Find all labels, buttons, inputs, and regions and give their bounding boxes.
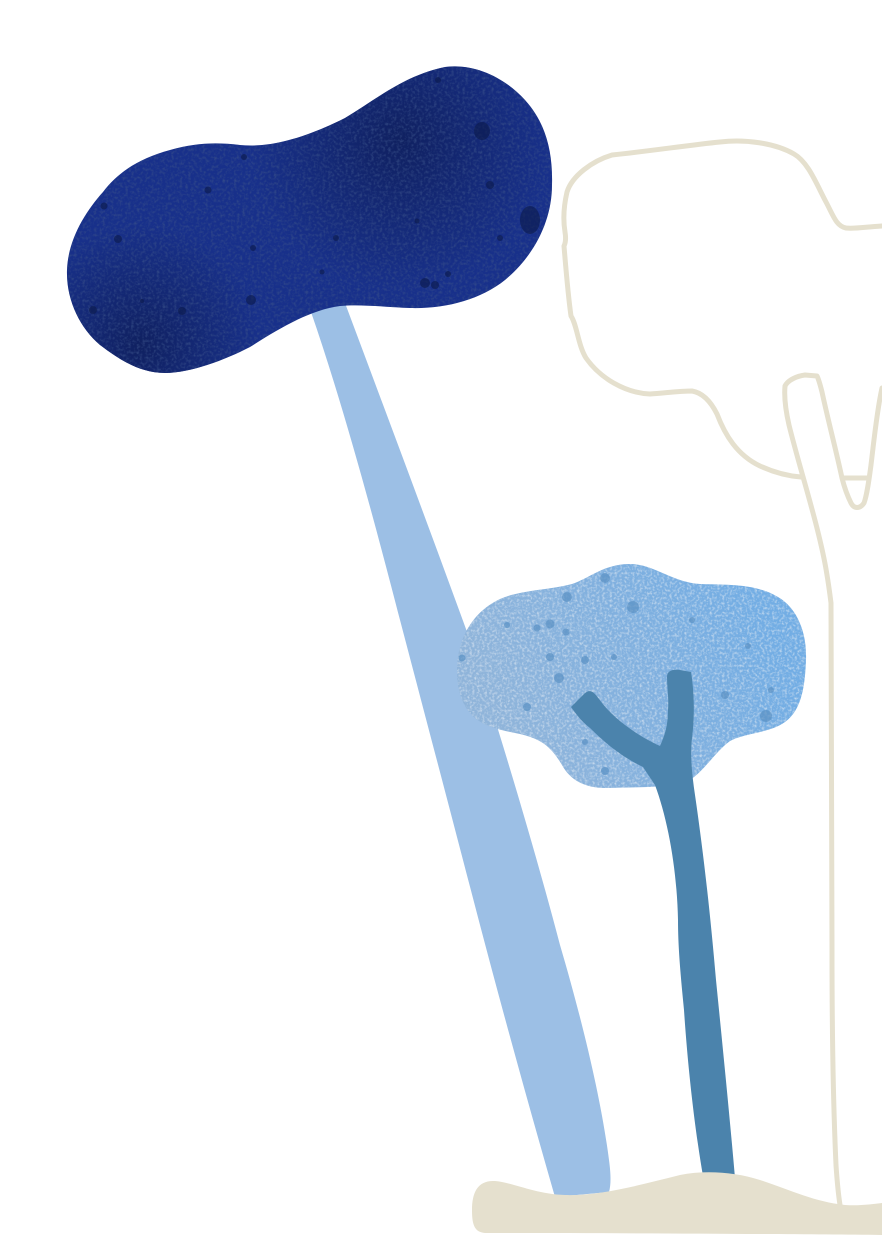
outline tree bbox=[564, 141, 882, 1205]
dark teal tree trunk bbox=[571, 670, 735, 1178]
dark blue canopy bbox=[67, 66, 552, 373]
light blue canopy bbox=[457, 564, 806, 788]
ground bbox=[472, 1172, 882, 1235]
light blue tall trunk bbox=[311, 303, 610, 1197]
